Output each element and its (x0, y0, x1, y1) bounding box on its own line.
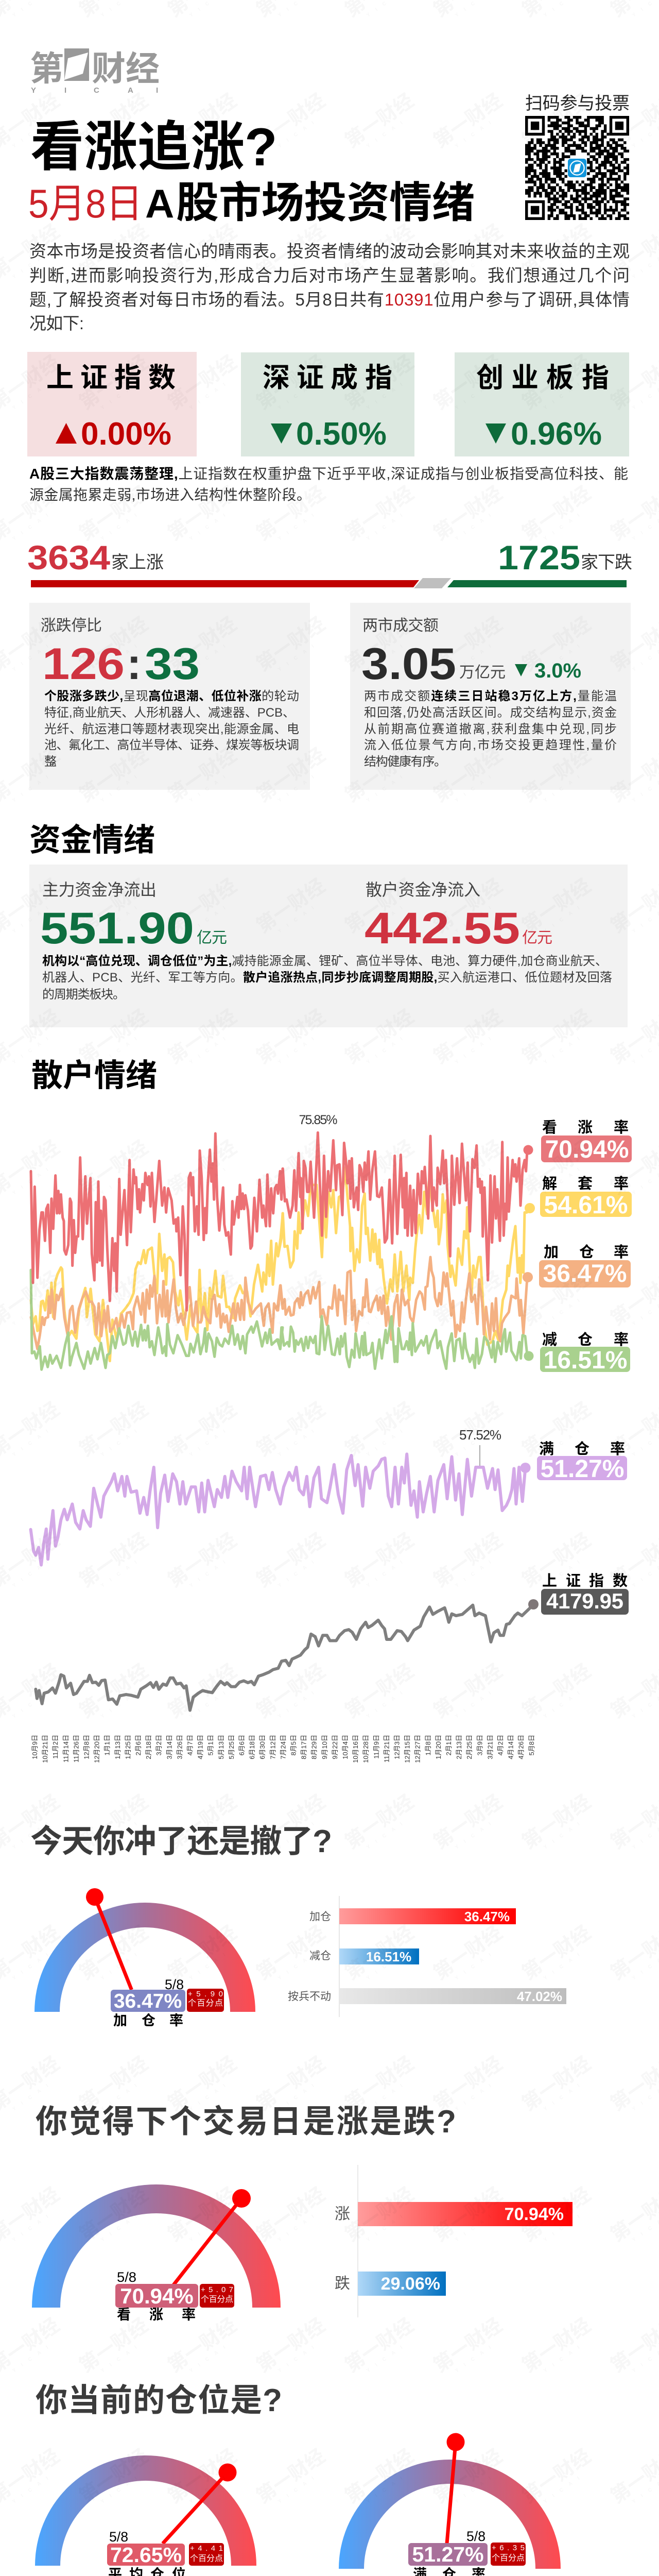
heading: 你觉得下个交易日是涨是跌?: 你觉得下个交易日是涨是跌? (36, 2104, 456, 2140)
heading: 你当前的仓位是?: 你当前的仓位是? (36, 2383, 282, 2418)
gauge: 看涨率: 看涨率 (117, 2307, 196, 2323)
gauge: 平均仓位: 个百分点 (190, 2554, 223, 2563)
x axis date labels: 1月13日 (114, 1735, 122, 1759)
bar chart: 加仓减仓: 减仓 (309, 1950, 331, 1962)
x axis date labels: 4月19日 (197, 1735, 204, 1759)
panel: 两市成交额: 和回落,仍处高活跃区间。成交结构显示,资金 (364, 706, 617, 720)
end dot (528, 1599, 539, 1609)
rising stocks count: 家上涨 (111, 553, 164, 572)
gauge: 加仓率 (34, 1888, 255, 2028)
panel: 创业板指: 创业板指 (476, 363, 609, 393)
peak marker (479, 1445, 480, 1468)
line chart: 满仓率 (31, 1427, 530, 1565)
series: 看涨率 red line (31, 1132, 527, 1310)
badge: 上证指数: 4179.95 (546, 1589, 623, 1613)
x axis date labels: 12月15日 (404, 1735, 411, 1763)
subtitle (28, 179, 475, 227)
badge: 满仓率: 51.27% (541, 1455, 624, 1483)
badge: 解套率: 解套率 (542, 1175, 629, 1192)
heading: 散户情绪: 散户情绪 (31, 1058, 157, 1093)
panel: 深证成指: 0.50% (296, 416, 387, 452)
title: 看涨追涨? (30, 117, 278, 177)
bar chart: 加仓减仓: 36.47% (464, 1909, 510, 1924)
falling stocks count: 家下跌 (581, 553, 632, 572)
line chart: sentiment rates (31, 1113, 535, 1369)
intro paragraph (29, 242, 630, 333)
gauge: 看涨率: 5/8 (117, 2269, 136, 2285)
bar chart: 涨跌: 29.06% (381, 2274, 440, 2294)
gauge: 满仓率: 个百分点 (492, 2553, 525, 2563)
bar chart: 涨跌: 涨 (335, 2206, 350, 2223)
panel: 资金情绪: 机器人、PCB、光纤、军工等方向。散户追涨热点,同步抄底调整周期股,买入航运港口、低位题材及回落 (42, 971, 612, 985)
x axis date labels: 6月30日 (258, 1735, 266, 1759)
badge: 加仓率 (539, 1244, 631, 1287)
badge: 解套率: 54.61% (544, 1192, 628, 1219)
end dots (523, 1145, 535, 1361)
heading: 资金情绪: 资金情绪 (29, 822, 155, 857)
panel: 涨跌停比: 涨跌停比 (41, 617, 102, 634)
panel: 两市成交额: 两市成交额连续三日站稳3万亿上方,量能温 (364, 689, 617, 703)
market summary text: 源金属拖累走弱,市场进入结构性休整阶段。 (29, 487, 311, 503)
panel: 两市成交额: 万亿元 (459, 664, 506, 681)
panel: 涨跌停比: 池、氟化工、高位半导体、证券、煤炭等板块调 (44, 738, 299, 752)
subtitle: A (145, 181, 174, 226)
badge: 加仓率: 36.47% (543, 1260, 627, 1287)
panel: 两市成交额: 两市成交额 (362, 617, 439, 634)
x axis date labels: 11月26日 (72, 1735, 80, 1762)
gauge: 平均仓位: 5/8 (109, 2529, 128, 2545)
panel: 涨跌停比: 整。 (44, 755, 64, 769)
x axis date labels: 12月3日 (393, 1735, 401, 1759)
badge: 看涨率 (541, 1119, 632, 1163)
panel: 创业板指: 0.96% (511, 416, 602, 452)
panel: 涨跌停比: 光纤、航运港口等题材表现突出,能源金属、电 (44, 722, 299, 736)
market summary text: A股三大指数震荡整理,上证指数在权重护盘下近乎平收,深证成指与创业板指受高位科技、能 (29, 466, 628, 482)
x axis date labels: 11月21日 (383, 1735, 390, 1762)
badge: 看涨率: 看涨率 (542, 1119, 629, 1136)
bar chart: 加仓减仓: 按兵不动 (288, 1991, 331, 2003)
line chart: 上证指数 (36, 1599, 539, 1710)
gauge: 平均仓位: +4.41 (190, 2544, 223, 2553)
badge: 减仓率: 16.51% (544, 1347, 627, 1374)
x axis date labels: 8月5日 (289, 1735, 298, 1755)
gauge: 满仓率: 51.27% (412, 2543, 484, 2566)
gauge: 加仓率: 5/8 (165, 1977, 184, 1992)
x axis date labels: 3月21日 (486, 1735, 494, 1759)
badge: 解套率 (540, 1175, 632, 1219)
x axis date labels: 1月1日 (103, 1735, 111, 1755)
x axis date labels: 5月25日 (228, 1735, 235, 1759)
end dot (520, 1463, 530, 1473)
gauge: 看涨率: +5.07 (201, 2285, 233, 2294)
x axis date labels: 10月28日 (362, 1735, 370, 1763)
x axis date labels: 11月9日 (372, 1735, 380, 1759)
bar chart: 加仓减仓: 16.51% (366, 1949, 411, 1964)
gauge: 平均仓位: 72.65% (110, 2543, 182, 2567)
heading: 今天你冲了还是撤了?: 今天你冲了还是撤了? (30, 1824, 332, 1859)
panel: 两市成交额: 3.0% (534, 659, 581, 682)
x axis date labels (31, 1735, 535, 1763)
badge: 减仓率: 减仓率 (542, 1331, 629, 1348)
series: 加仓率 orange line (31, 1257, 527, 1349)
gauge: 看涨率: 70.94% (120, 2284, 194, 2308)
x axis date labels: 10月16日 (352, 1735, 359, 1763)
falling stocks count: 1725 (498, 538, 580, 577)
panel: 两市成交额 (350, 603, 631, 790)
x axis date labels: 4月2日 (496, 1735, 505, 1755)
intro paragraph: 判断,进而影响投资行为,形成合力后对市场产生显著影响。我们想通过几个问 (29, 266, 630, 285)
gauge: 满仓率: +6.35 (492, 2544, 525, 2552)
panel: 资金情绪: 亿元 (197, 929, 227, 946)
intro paragraph: 题,了解投资者对每日市场的看法。5月8日共有10391位用户参与了调研,具体情 (29, 290, 630, 309)
panel: 两市成交额: 结构健康有序。 (364, 755, 446, 769)
bar chart: 涨跌: 跌 (335, 2275, 350, 2292)
x axis date labels: 4月7日 (186, 1735, 194, 1755)
x axis date labels: 1月8日 (424, 1735, 432, 1755)
qr code header (525, 116, 629, 220)
x axis date labels: 1月25日 (124, 1735, 132, 1759)
x axis date labels: 12月20日 (93, 1735, 101, 1763)
gauge: 加仓率: 个百分点 (188, 1998, 223, 2008)
x axis date labels: 5月8日 (528, 1735, 535, 1755)
gauge: 加仓率: +5.90 (188, 1990, 223, 1998)
gauge: 看涨率: 个百分点 (201, 2295, 233, 2304)
logo: YICAI 第一财经: 财经 (92, 49, 160, 88)
bar chart: 加仓减仓 (288, 1896, 566, 2017)
gauge: 平均仓位 (35, 2455, 256, 2576)
panel: 资金情绪 (29, 865, 628, 1027)
x axis date labels: 12月8日 (82, 1735, 91, 1759)
x axis date labels: 7月24日 (279, 1735, 287, 1759)
panel: 上证指数 (27, 352, 197, 456)
panel: 涨跌停比: 特征,商业航天、人形机器人、减速器、PCB、 (44, 706, 295, 720)
panel: 两市成交额: 3.05 (361, 639, 456, 689)
logo: YICAI 第一财经 (30, 48, 160, 95)
x axis date labels: 8月17日 (300, 1735, 308, 1759)
x axis date labels: 2月1日 (445, 1735, 453, 1755)
badge: 看涨率: 70.94% (545, 1136, 629, 1163)
x axis date labels: 7月12日 (269, 1735, 276, 1759)
x axis date labels: 10月9日 (31, 1735, 39, 1759)
panel: 资金情绪: 亿元 (522, 929, 552, 946)
subtitle: 5月8日 (28, 181, 143, 226)
peak label 57.52%: 57.52% (459, 1427, 501, 1443)
x axis date labels: 11月14日 (62, 1735, 70, 1762)
x axis date labels: 2月25日 (465, 1735, 473, 1759)
x axis date labels: 5月13日 (217, 1735, 225, 1759)
panel: 涨跌停比 (29, 603, 310, 790)
badge: 满仓率 (537, 1440, 627, 1483)
panel: 深证成指 (241, 352, 414, 456)
series: 满仓率 purple line (31, 1454, 525, 1565)
rising stocks count (27, 538, 164, 577)
series: 减仓率 green line (31, 1270, 527, 1369)
x axis date labels: 12月27日 (414, 1735, 422, 1763)
intro paragraph: 资本市场是投资者信心的晴雨表。投资者情绪的波动会影响其对未来收益的主观 (29, 242, 630, 261)
bar chart: 加仓减仓: 加仓 (309, 1911, 331, 1923)
panel: 涨跌停比: 126 (42, 639, 125, 689)
panel: 资金情绪: 的周期类板块。 (42, 988, 125, 1002)
gauge: 满仓率: 5/8 (466, 2529, 485, 2544)
panel: 上证指数: 0.00% (81, 416, 171, 452)
panel: 涨跌停比: 个股涨多跌少,呈现高位退潮、低位补涨的轮动 (44, 689, 299, 703)
falling stocks count (498, 538, 632, 577)
peak label 75.85%: 75.85% (299, 1113, 338, 1127)
gauge: 满仓率 (339, 2433, 561, 2576)
rising stocks count: 3634 (27, 538, 110, 577)
rise fall ratio bar (31, 578, 627, 588)
panel: 资金情绪: 551.90 (40, 904, 194, 953)
x axis date labels: 3月14日 (165, 1735, 173, 1759)
panel: 创业板指 (455, 352, 629, 456)
panel: 资金情绪: 机构以“高位兑现、调仓低位”为主,减持能源金属、锂矿、高位半导体、电池、算力硬件,加仓商业航天、 (42, 954, 608, 968)
bar chart: 加仓减仓: 47.02% (517, 1989, 562, 2004)
badge: 减仓率 (540, 1331, 630, 1374)
panel: 上证指数: 上证指数 (46, 363, 176, 393)
x axis date labels: 2月13日 (455, 1735, 463, 1759)
x axis date labels: 8月29日 (310, 1735, 318, 1759)
panel: 两市成交额: 流入低位景气方向,市场交投更趋理性,量价 (364, 738, 617, 752)
gauge: 看涨率 (32, 2184, 281, 2323)
panel: 涨跌停比: 33 (145, 639, 200, 689)
logo: YICAI 第一财经: 第 (30, 49, 64, 88)
gauge: 加仓率: 加仓率 (113, 2013, 183, 2028)
bar chart: 涨跌 (335, 2165, 573, 2317)
panel: 资金情绪: 442.55 (365, 904, 520, 953)
x axis date labels: 4月26日 (517, 1735, 525, 1759)
badge: 上证指数: 上证指数 (542, 1572, 628, 1589)
x axis date labels: 3月9日 (476, 1735, 483, 1755)
bar chart: 涨跌: 70.94% (505, 2205, 564, 2224)
x axis date labels: 11月2日 (51, 1735, 59, 1759)
badge: 加仓率: 加仓率 (544, 1244, 629, 1261)
x axis date labels: 4月14日 (507, 1735, 515, 1759)
intro paragraph: 况如下: (29, 314, 84, 333)
x axis date labels: 2月6日 (134, 1735, 142, 1755)
badge: 上证指数 (541, 1572, 629, 1615)
x axis date labels: 5月1日 (207, 1735, 215, 1755)
panel: 资金情绪: 散户资金净流入 (366, 880, 480, 899)
panel: 两市成交额: 从前期高位赛道撤离,获利盘集中兑现,同步 (364, 722, 617, 736)
x axis date labels: 6月6日 (238, 1735, 246, 1755)
panel: 深证成指: 深证成指 (263, 363, 392, 393)
market summary text (29, 466, 628, 503)
badge: 满仓率: 满仓率 (539, 1440, 625, 1458)
x axis date labels: 2月18日 (145, 1735, 152, 1759)
qr code header caption: 扫码参与投票 (525, 94, 630, 113)
series: 上证指数 gray line (36, 1605, 533, 1710)
subtitle: 股市场投资情绪 (176, 179, 475, 227)
x axis date labels: 9月22日 (331, 1735, 339, 1759)
series: 解套率 yellow line (31, 1168, 529, 1361)
logo: YICAI 第一财经: YICAI (31, 86, 158, 95)
x axis date labels: 10月21日 (41, 1735, 49, 1763)
x axis date labels: 3月2日 (155, 1735, 163, 1755)
gauge: 加仓率: 36.47% (114, 1990, 182, 2012)
panel: 资金情绪: 主力资金净流出 (42, 880, 157, 899)
x axis date labels: 9月10日 (321, 1735, 328, 1759)
x axis date labels: 6月18日 (248, 1735, 256, 1759)
panel: 涨跌停比: : (127, 639, 142, 689)
x axis date labels: 1月20日 (435, 1735, 442, 1759)
x axis date labels: 3月26日 (176, 1735, 183, 1759)
x axis date labels: 10月4日 (341, 1735, 349, 1759)
